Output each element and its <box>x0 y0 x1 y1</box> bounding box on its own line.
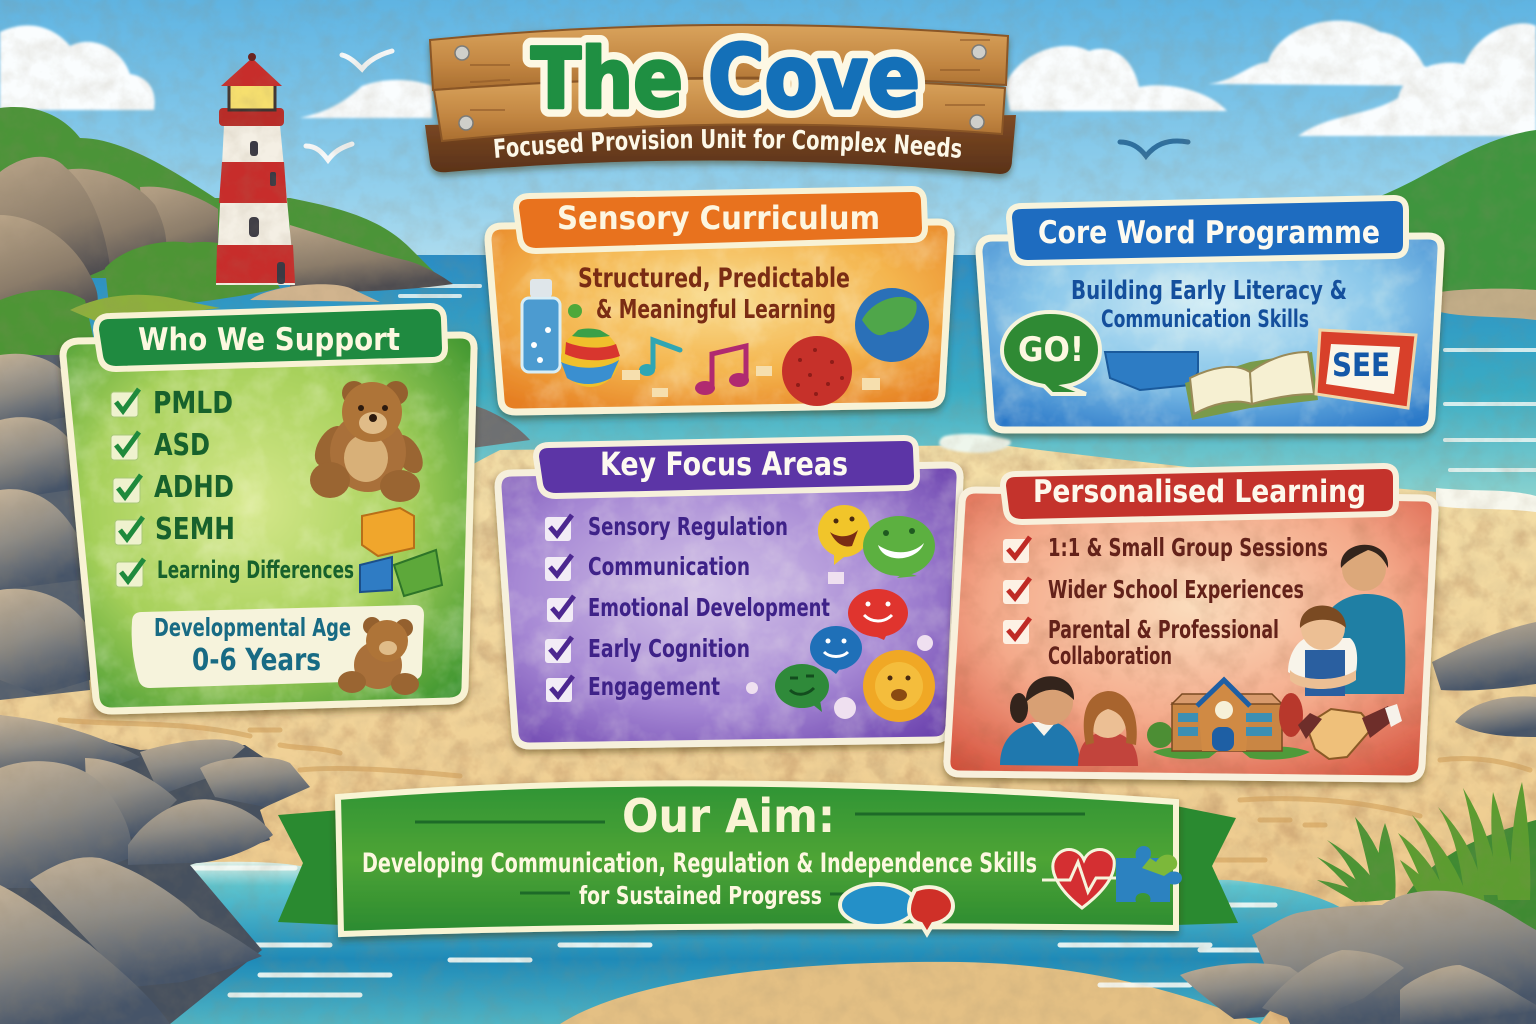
small stars <box>746 572 933 719</box>
age callout: Developmental Age <box>154 613 351 642</box>
emoji: blue smile <box>810 626 862 674</box>
bottom left rocks <box>0 715 310 1024</box>
heading: The Cove <box>531 26 920 129</box>
emoji: red smile <box>848 589 908 640</box>
icon: green bead <box>568 304 582 318</box>
heading text: Personalised Learning <box>1033 474 1366 510</box>
icon: red spiky ball <box>782 336 852 406</box>
panel body <box>979 236 1441 430</box>
icon: blue book <box>1105 352 1198 390</box>
panel: Sensory Curriculum <box>488 189 951 412</box>
heading text: Core Word Programme <box>1038 215 1380 251</box>
icon: blue-green tactile ball <box>855 288 929 362</box>
icon: SEE card <box>1316 330 1416 408</box>
heading tab <box>1009 198 1406 263</box>
panel texture <box>501 468 957 743</box>
headland ledge <box>250 284 380 302</box>
panel texture <box>66 338 471 708</box>
upper left rocks <box>0 157 453 330</box>
icon: GO speech bubble: GO! <box>1018 330 1084 370</box>
screws <box>455 45 986 130</box>
heading tab <box>516 189 925 251</box>
checklist <box>111 386 354 587</box>
checklist: Parental & Professional <box>1048 615 1279 644</box>
heading text: Key Focus Areas <box>600 445 848 483</box>
right hill <box>1375 130 1536 295</box>
heading text: Who We Support <box>138 322 400 358</box>
checklist: Communication <box>588 552 750 581</box>
heading tab <box>1003 466 1396 522</box>
checklist: ASD <box>154 428 210 463</box>
panel body <box>947 490 1435 779</box>
icon: handshake <box>1298 704 1402 759</box>
ribbon body <box>338 783 1176 934</box>
panel body <box>498 465 960 746</box>
icon: music notes <box>639 340 749 395</box>
checklist: SEMH <box>155 512 235 547</box>
clouds <box>0 21 1536 136</box>
icon: red oval behind handshake <box>1279 693 1303 737</box>
icon: parent and child <box>1000 676 1138 766</box>
plant <box>1317 782 1536 940</box>
bottom right rocks <box>1180 891 1536 1024</box>
sand ripples <box>60 720 1530 860</box>
checklist: PMLD <box>153 386 233 421</box>
checklist: ADHD <box>154 470 234 505</box>
panel texture <box>982 239 1438 427</box>
icon: teddy bear <box>309 381 429 502</box>
panel texture <box>950 493 1432 776</box>
left headland greenery <box>0 107 440 278</box>
icon: emoji cluster <box>746 505 935 722</box>
checklist: Wider School Experiences <box>1048 575 1304 604</box>
sea <box>0 255 1536 525</box>
divider flourishes <box>415 814 1085 894</box>
emoji: green wink <box>775 664 829 712</box>
icon: GO speech bubble <box>1002 312 1100 394</box>
age callout <box>132 605 424 695</box>
panel: Key Focus Areas <box>498 438 960 746</box>
panel body <box>63 335 474 711</box>
birds <box>306 51 392 160</box>
right rocks <box>1432 622 1536 737</box>
emoji: green grinning <box>863 516 935 578</box>
checklist: Collaboration <box>1048 642 1172 670</box>
panel: Core Word Programme: Communication Skills <box>1101 305 1309 333</box>
icon: heart with pulse <box>1042 850 1122 908</box>
heading tab <box>96 306 445 369</box>
bottom sea <box>130 862 1345 1024</box>
sand blotches <box>0 445 1536 1024</box>
panel: Sensory Curriculum: & Meaningful Learning <box>596 295 836 325</box>
checklist: Learning Differences <box>157 556 354 584</box>
foam at beach <box>1436 488 1536 512</box>
icon: puzzle piece <box>1116 846 1182 902</box>
icon: SEE card: SEE <box>1332 346 1390 384</box>
heading: The Cove: The <box>531 30 683 128</box>
icon: open book <box>1185 352 1318 420</box>
panel: Personalised Learning <box>947 466 1435 779</box>
icon: sensory bottle <box>522 279 560 372</box>
panel body <box>488 222 951 412</box>
checklist: Early Cognition <box>588 634 750 663</box>
foam lines <box>370 286 1536 470</box>
subtitle: Focused Provision Unit for Complex Needs <box>494 128 961 158</box>
foam waves <box>185 868 1310 995</box>
banner: Our Aim <box>278 783 1238 934</box>
wooden planks <box>425 25 1016 174</box>
checklist <box>545 512 830 702</box>
description: Structured, Predictable <box>578 263 850 294</box>
checklist: Emotional Development <box>588 593 830 622</box>
heading: Our Aim: <box>622 789 835 843</box>
checklist: Sensory Regulation <box>588 512 788 541</box>
icon: school building <box>1147 680 1310 760</box>
icon: rainbow ball <box>561 328 620 387</box>
banner: Our Aim: for Sustained Progress <box>579 881 822 910</box>
emoji: orange sun <box>863 650 935 722</box>
panel: Core Word Programme <box>979 198 1441 430</box>
heading tab <box>536 438 917 496</box>
title sign <box>421 24 1020 182</box>
checklist: 1:1 & Small Group Sessions <box>1048 533 1328 562</box>
left rocks <box>0 354 90 700</box>
beach sand <box>0 445 1536 1024</box>
sand shapes <box>622 366 880 397</box>
heading: The Cove: Cove <box>708 26 920 129</box>
description: Building Early Literacy & <box>1071 276 1347 306</box>
bottom sand patch <box>560 962 1260 1024</box>
checklist: Engagement <box>588 672 720 701</box>
sky <box>0 0 1536 320</box>
age callout: 0-6 Years <box>192 643 321 678</box>
wood grain <box>470 40 990 110</box>
checklist <box>1003 533 1328 670</box>
ribbon tails <box>278 810 342 925</box>
icon: speech bubbles <box>840 884 953 934</box>
heading text: Sensory Curriculum <box>557 199 880 237</box>
icon: adult and child <box>1288 545 1405 696</box>
bushes <box>0 242 280 360</box>
lighthouse <box>216 53 295 285</box>
panel texture <box>491 225 948 409</box>
icon: small teddy <box>338 617 419 695</box>
heading: The Cove: Cove <box>708 26 920 129</box>
icon: toy blocks <box>360 508 442 596</box>
aim statement: Developing Communication, Regulation & Independence Skills <box>362 848 1037 879</box>
rock near centre <box>472 405 530 448</box>
heading: The Cove: The <box>531 30 683 128</box>
panel: Who We Support <box>63 306 474 711</box>
emoji: yellow laughing <box>818 505 870 565</box>
